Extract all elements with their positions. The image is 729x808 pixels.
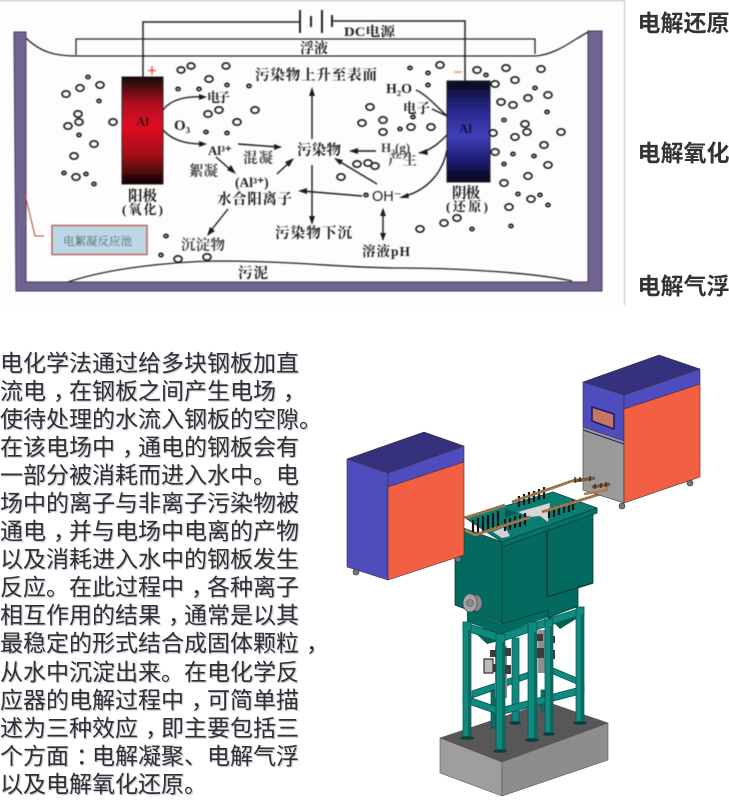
diagram labels: 阳极 — [128, 187, 158, 205]
diagram labels: 污染物上升至表面 — [255, 66, 378, 84]
support frame back parts — [472, 638, 577, 728]
diagram labels: 溶液pH — [362, 244, 410, 259]
diagram labels: DC电源 — [344, 24, 396, 39]
DC power supply — [143, 10, 465, 81]
concrete base — [440, 702, 608, 796]
body paragraph: 场中的离子与非离子污染物被 — [0, 490, 299, 516]
callout: reactor tank label: 电絮凝反应池 — [63, 234, 132, 248]
diagram labels: H₂(g) — [381, 140, 410, 155]
body paragraph: 从水中沉淀出来。在电化学反 — [0, 659, 299, 685]
diagram labels: (还原) — [446, 199, 488, 214]
diagram labels: 混凝 — [243, 149, 274, 167]
body paragraph: 应器的电解过程中 ，可简单描 — [0, 687, 299, 713]
arrowheads — [199, 87, 428, 241]
callout: reactor tank label — [24, 190, 147, 254]
side label: electrolytic flotation: 电解气浮 — [638, 273, 729, 299]
diagram labels: (Al³⁺) — [235, 175, 269, 190]
copper connectors at right cabinet — [575, 476, 610, 494]
side label: electrolytic reduction: 电解还原 — [638, 10, 729, 36]
diagram labels: 污泥 — [238, 265, 268, 282]
body paragraph — [0, 350, 329, 797]
diagram labels: 絮凝 — [189, 162, 218, 180]
diagram labels: H₂O — [386, 82, 412, 97]
leg feet — [460, 721, 587, 753]
diagram labels: 沉淀物 — [181, 236, 226, 254]
body paragraph: 以及消耗进入水中的钢板发生 — [0, 546, 299, 572]
tank walls — [14, 31, 602, 291]
diagram labels: 电子 — [403, 100, 430, 116]
diagram labels: OH⁻ — [372, 189, 401, 205]
body paragraph: 反应。在此过程中 ，各种离子 — [0, 574, 299, 600]
electrode plates and copper bus bars — [465, 478, 607, 538]
bubbles — [62, 62, 565, 262]
body paragraph: 最稳定的形式结合成固体颗粒 ， — [0, 630, 329, 656]
diagram labels — [122, 24, 488, 282]
body paragraph: 一部分被消耗而进入水中。电 — [0, 462, 299, 488]
body paragraph: 相互作用的结果 ，通常是以其 — [0, 602, 299, 628]
body paragraph: 使待处理的水流入钢板的空隙。 — [0, 406, 322, 432]
body paragraph: 流电 ，在钢板之间产生电场 ， — [0, 378, 306, 404]
diagram labels: Al — [136, 114, 149, 129]
diagram labels: (氧化) — [122, 202, 163, 217]
body paragraph: 在该电场中 ，通电的钢板会有 — [0, 434, 299, 460]
diagram labels: O₃ — [174, 118, 191, 134]
side label: electrolytic oxidation: 电解氧化 — [638, 140, 729, 166]
diagram labels: 产生 — [388, 152, 418, 169]
left cabinet — [347, 432, 464, 580]
equipment illustration — [347, 355, 700, 796]
reaction arrows — [163, 90, 447, 240]
body paragraph: 以及电解氧化还原。 — [0, 771, 207, 797]
water surface and scum box — [26, 32, 588, 56]
right cabinet — [583, 355, 700, 509]
flanged pipe outlet — [463, 594, 482, 612]
diagram labels: 水合阳离子 — [217, 190, 292, 208]
body paragraph: 个方面 ：电解凝聚、电解气浮 — [0, 743, 299, 769]
diagram labels: 污染物下沉 — [275, 224, 352, 242]
diagram labels: 阴极 — [452, 184, 480, 202]
diagram labels: 污染物 — [297, 141, 342, 159]
body paragraph: 述为三种效应 ，即主要包括三 — [0, 715, 299, 741]
sludge line — [68, 261, 572, 282]
cathode — [447, 81, 490, 182]
diagram labels: 浮液 — [300, 40, 328, 57]
valves and pipes — [484, 630, 555, 698]
diagram labels: Al — [459, 121, 472, 136]
support frame front parts — [463, 607, 584, 752]
diagram labels: 电子 — [207, 90, 230, 105]
leg shading — [468, 614, 584, 752]
diagram labels: Al³⁺ — [208, 143, 232, 158]
plus and minus signs — [148, 66, 156, 75]
teal tank — [455, 492, 597, 634]
hoppers — [470, 612, 576, 644]
body paragraph: 通电 ，并与电场中电离的产物 — [0, 518, 299, 544]
body paragraph: 电化学法通过给多块钢板加直 — [0, 350, 299, 376]
anode — [122, 77, 163, 184]
diagram panel — [0, 0, 625, 305]
